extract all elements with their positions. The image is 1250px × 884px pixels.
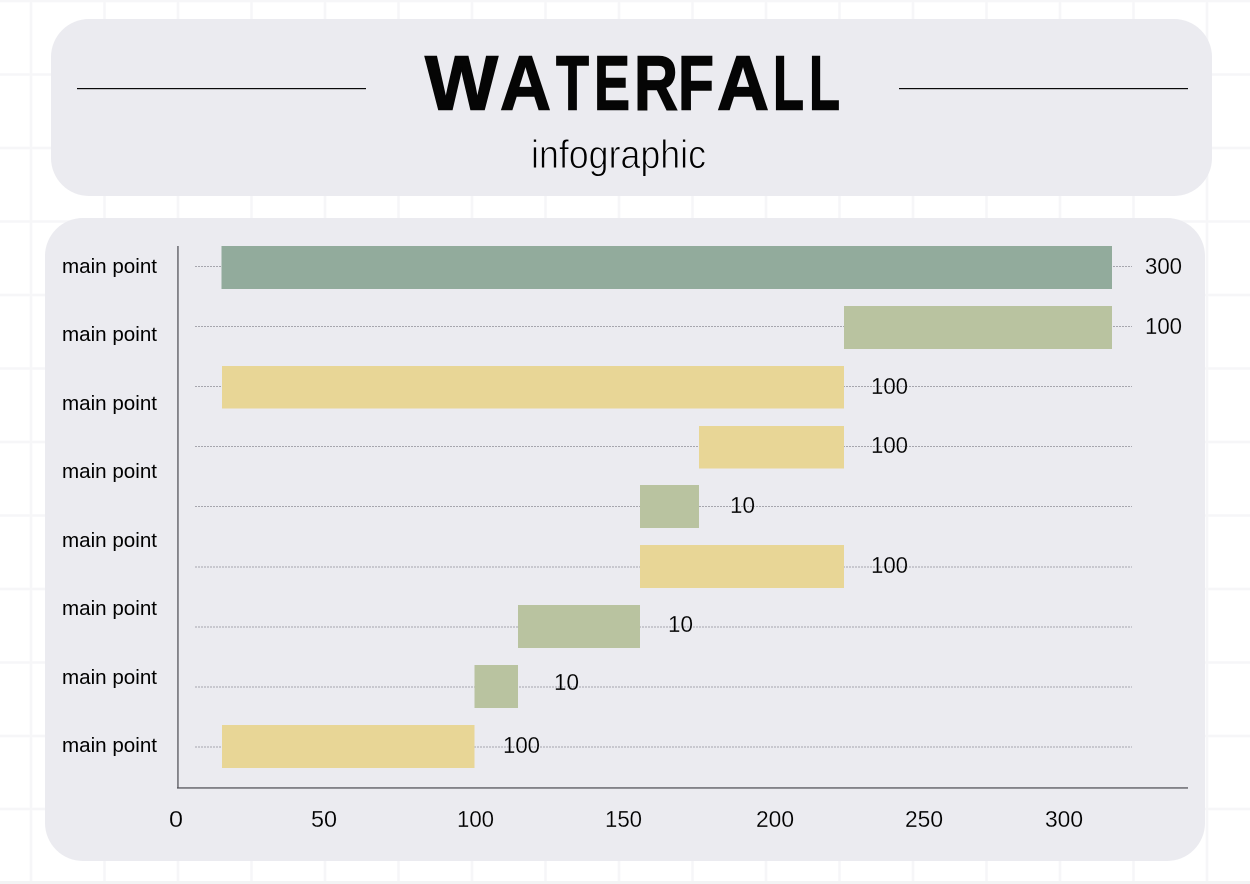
- subtitle: infographic: [531, 133, 706, 177]
- x axis tick labels: 200: [756, 806, 794, 832]
- right title rule: [899, 88, 1188, 89]
- x axis tick labels: 300: [1045, 806, 1083, 832]
- row guide lines: [195, 266, 1132, 747]
- value labels: [503, 253, 1187, 758]
- x axis tick labels: 150: [605, 806, 642, 832]
- title: F: [678, 40, 714, 126]
- title: A: [717, 40, 769, 126]
- title: R: [634, 40, 678, 126]
- value labels: 300: [1145, 253, 1182, 279]
- value labels: 100: [871, 373, 908, 399]
- category labels: main point: [62, 324, 157, 346]
- title: T: [556, 40, 589, 126]
- value labels: 10: [668, 611, 693, 637]
- title: W: [425, 40, 498, 126]
- title: L: [809, 40, 840, 126]
- category labels: main point: [62, 598, 157, 620]
- left title rule: [77, 88, 366, 89]
- panel: waterfall chart: [45, 218, 1205, 861]
- value labels: 100: [871, 432, 908, 458]
- x axis tick labels: 0: [169, 806, 183, 832]
- x axis tick labels: [169, 806, 1083, 832]
- x axis tick labels: 250: [905, 806, 943, 832]
- category labels: [62, 256, 157, 757]
- category labels: main point: [62, 461, 157, 483]
- value labels: 10: [730, 492, 755, 518]
- value labels: 100: [1145, 313, 1182, 339]
- x axis: [177, 787, 1188, 789]
- y axis: [177, 246, 179, 788]
- category labels: main point: [62, 735, 157, 757]
- category labels: main point: [62, 667, 157, 689]
- title: E: [594, 40, 630, 126]
- category labels: main point: [62, 393, 157, 415]
- category labels: main point: [62, 256, 157, 278]
- value labels: 100: [503, 732, 540, 758]
- title: A: [500, 40, 551, 126]
- x axis tick labels: 100: [457, 806, 494, 832]
- category labels: main point: [62, 530, 157, 552]
- bars: [222, 246, 1112, 768]
- x axis tick labels: 50: [311, 806, 337, 832]
- value labels: 100: [871, 552, 908, 578]
- value labels: 10: [554, 669, 579, 695]
- title: L: [773, 40, 804, 126]
- panel: title header: [51, 19, 1212, 196]
